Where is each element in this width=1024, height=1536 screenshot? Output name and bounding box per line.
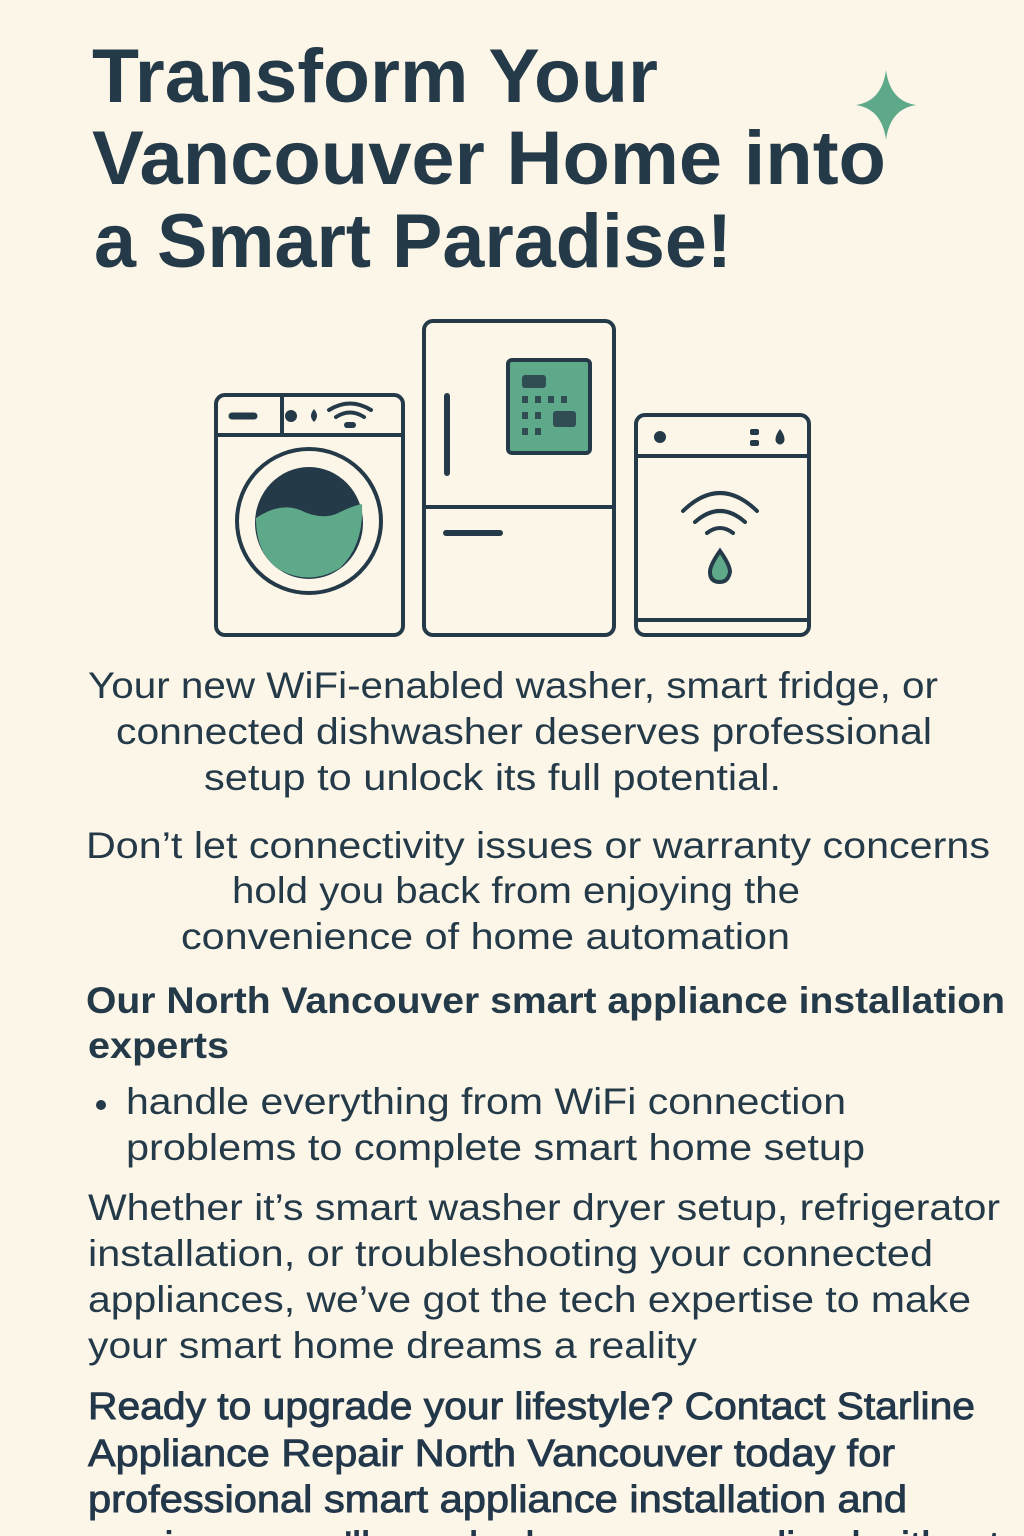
text block: intro: connected dishwasher deserves professional — [116, 711, 932, 752]
call to action: Ready to upgrade your lifestyle? Contact Starline — [88, 1386, 975, 1428]
call to action: professional smart appliance installation and — [88, 1479, 907, 1521]
icon: sparkle — [856, 70, 916, 140]
heading: experts — [86, 980, 1005, 1066]
call to action — [88, 1386, 1000, 1536]
title: Vancouver Home into — [92, 116, 886, 201]
icon: washer — [216, 395, 403, 635]
text block: intro: setup to unlock its full potential. — [204, 757, 781, 798]
icon: fridge — [424, 321, 614, 635]
icon: dishwasher — [636, 415, 809, 635]
text block: whether — [88, 1187, 1000, 1366]
text block: whether: appliances, we’ve got the tech expertise to make — [88, 1279, 971, 1320]
text block: whether: your smart home dreams a reality — [88, 1325, 698, 1366]
text block: intro: Your new WiFi-enabled washer, smart fridge, or — [88, 665, 938, 706]
bullet item — [96, 1081, 865, 1168]
text block: concerns: convenience of home automation — [181, 916, 790, 957]
heading: experts: Our North Vancouver smart appliance installation — [86, 980, 1005, 1021]
text block: concerns — [86, 825, 990, 957]
appliances illustration — [216, 321, 809, 635]
title: Transform Your — [92, 34, 658, 119]
text block: whether: installation, or troubleshooting your connected — [88, 1233, 933, 1274]
text block: concerns: Don’t let connectivity issues or warranty concerns — [86, 825, 990, 866]
bullet item: handle everything from WiFi connection — [126, 1081, 846, 1122]
bullet item: problems to complete smart home setup — [126, 1127, 865, 1168]
call to action: Appliance Repair North Vancouver today for — [88, 1433, 895, 1475]
text block: concerns: hold you back from enjoying the — [232, 870, 800, 911]
text block: whether: Whether it’s smart washer dryer setup, refrigerator — [88, 1187, 1000, 1228]
heading: experts: experts — [88, 1025, 229, 1066]
title — [92, 34, 886, 284]
title: a Smart Paradise! — [94, 199, 732, 284]
text block: intro — [88, 665, 938, 798]
